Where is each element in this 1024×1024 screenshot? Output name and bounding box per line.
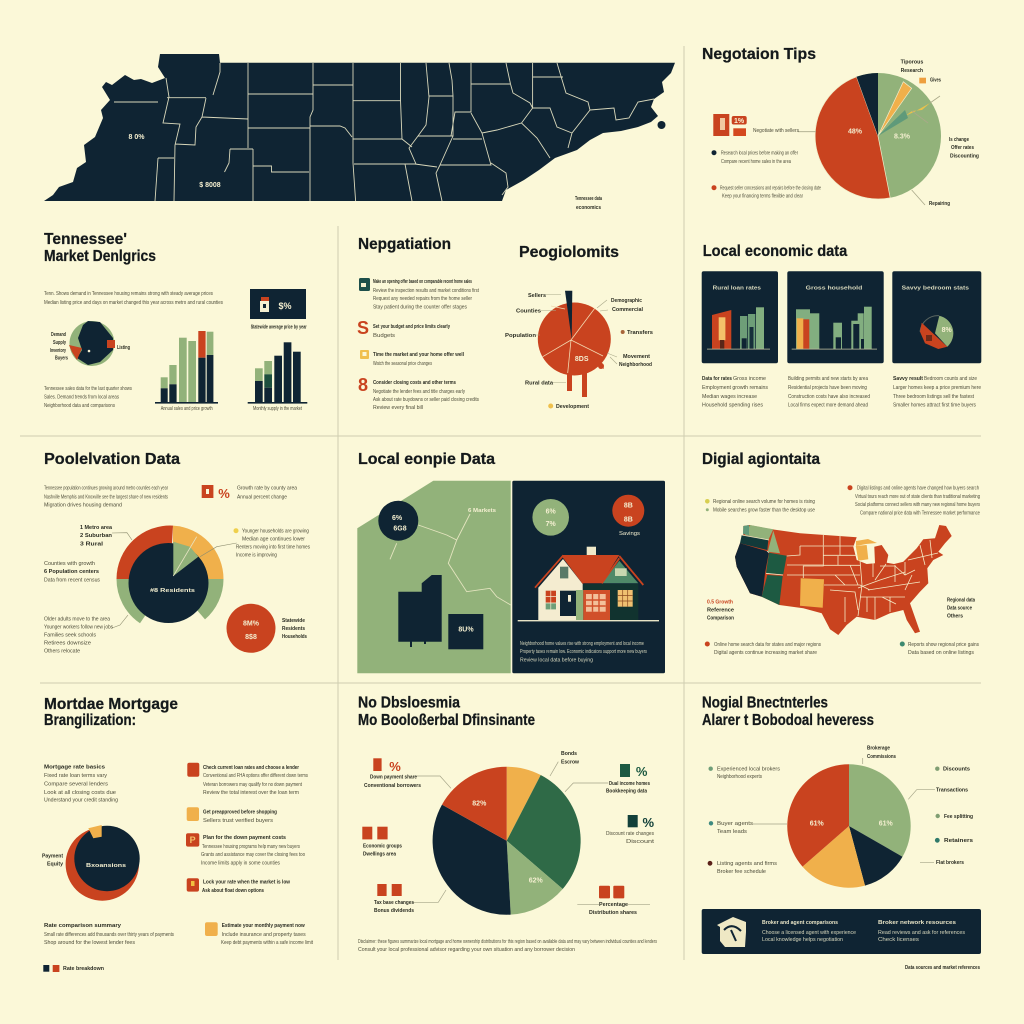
list item 4: 8	[358, 375, 368, 395]
red stat circle: Residents	[282, 626, 305, 632]
text block: Neighborhood data and comparisons	[44, 403, 115, 409]
heading	[44, 231, 156, 265]
donut chart	[42, 825, 140, 901]
pie chart: 61%	[879, 820, 893, 828]
heading: Mo Booloßerbal Dfinsinante	[358, 712, 535, 729]
text block: Sales. Demand trends from local areas	[44, 394, 119, 400]
captions: Smaller homes attract first time buyers	[893, 402, 976, 408]
bar chart 1	[155, 331, 218, 412]
captions: Data for rates	[702, 376, 732, 382]
stat callout: Annual percent change	[237, 494, 287, 500]
pie labels: Neighborhood	[619, 362, 652, 368]
captions: Larger homes keep a price premium here	[893, 385, 981, 391]
text blocks: Digital listings and online agents have changed how buyers search	[857, 486, 979, 492]
pie labels: Tiporous	[901, 60, 924, 66]
pie labels: Movement	[623, 354, 650, 360]
intro text: Tennessee population continues growing around metro counties each year	[44, 486, 168, 492]
item 3: Plan for the down payment costs	[203, 835, 286, 841]
map legend: 0.5 Growth	[707, 600, 733, 606]
navy house panel: Savings	[619, 531, 641, 537]
red stat circle	[226, 604, 307, 653]
callouts: Tax base changes	[374, 900, 414, 906]
pie labels: Transfers	[627, 330, 653, 336]
captions: Three bedroom listings sell the fastest	[893, 394, 975, 400]
green map panel: 6%	[392, 515, 403, 522]
callouts: Down payment share	[370, 774, 417, 780]
map note: Tennessee data	[575, 196, 602, 202]
intro text: Median listing price and days on market changed this year across metro and rural counties	[44, 300, 223, 306]
card 3: Savvy bedroom stats	[902, 286, 969, 292]
list item 2	[357, 318, 450, 339]
captions: Gross income	[733, 376, 766, 382]
bottom left text: Rate comparison summary	[44, 923, 121, 929]
pie labels: Population	[505, 333, 536, 339]
bottom left text: Small rate differences add thousands over thirty years of payments	[44, 932, 174, 938]
navy house panel: 8B	[624, 516, 633, 524]
navy house panel: 6%	[546, 508, 557, 516]
captions: Residential projects have been moving	[788, 385, 867, 391]
text block: Compare recent home sales in the area	[721, 159, 791, 165]
icon: house	[518, 547, 659, 621]
pie labels: Commercial	[612, 307, 644, 313]
pie chart	[798, 73, 941, 205]
left text block: Compare several lenders	[44, 782, 109, 788]
item 3: Income limits apply in some counties	[201, 860, 280, 866]
intro text: Migration drives housing demand	[44, 502, 122, 508]
list item 4: Negotiate the lender fees and title charges early	[373, 389, 465, 395]
labels: Income is improving	[236, 552, 277, 558]
labels: 2 Suburban	[80, 533, 112, 539]
callouts: Discount rate changes	[606, 831, 654, 837]
USA map	[735, 525, 952, 635]
left text block: Look at all closing costs due	[44, 790, 116, 796]
list item 3: Time the market and your home offer well	[373, 352, 465, 358]
text blocks: Social platforms connect sellers with many new regional home buyers	[855, 502, 980, 508]
heading: Digial agiontaita	[702, 451, 820, 468]
labels: Experienced local brokers	[717, 766, 781, 772]
heading: Peogiolomits	[519, 244, 619, 261]
item 2: Get preapproved before shopping	[203, 810, 277, 816]
captions	[702, 376, 981, 408]
panel: distribution pie	[358, 695, 657, 953]
navy stat box	[250, 289, 307, 330]
item 1: Conventional and FHA options offer different down terms	[203, 773, 308, 779]
text blocks: Mobile searches grow faster than the desktop use	[713, 508, 815, 514]
intro text	[44, 291, 223, 306]
labels: Younger households are growing	[242, 528, 309, 534]
donut chart: Payment	[42, 854, 63, 860]
item 1	[187, 763, 308, 796]
bar chart 2: Monthly supply in the market	[253, 406, 302, 412]
labels: Renters moving into first time homes	[236, 544, 310, 550]
item 3	[186, 833, 305, 866]
pie labels	[505, 293, 653, 410]
green map panel: 6 Markets	[468, 508, 496, 514]
navy house panel: 7%	[546, 521, 557, 528]
captions: Employment growth remains	[702, 385, 769, 391]
list item 3: Watch the seasonal price changes	[373, 361, 432, 367]
red stat circle: Households	[282, 634, 307, 640]
pie chart	[433, 767, 581, 915]
pie labels: Gives	[930, 78, 941, 84]
panel: Tennessee market dynamics	[44, 231, 307, 412]
text block	[44, 386, 132, 409]
labels: Buyer agents	[717, 821, 754, 827]
map note: economics	[576, 205, 601, 211]
text blocks	[705, 485, 980, 516]
labels: Families seek schools	[44, 632, 97, 638]
donut chart: Bxoansions	[86, 863, 126, 869]
map: Tennessee counties	[44, 54, 675, 201]
pie labels: Development	[556, 404, 589, 410]
text blocks: Virtual tours reach more out of state clients than traditional marketing	[855, 494, 980, 500]
callouts: Dwellings area	[363, 852, 396, 858]
pie labels: Counties	[516, 308, 541, 314]
list item 4: Review every final bill	[373, 405, 423, 411]
labels: Counties with growth	[44, 561, 95, 567]
pie chart	[787, 764, 911, 888]
list item 1: Make an opening offer based on comparable recent home sales	[373, 279, 472, 285]
list item 4: Ask about rate buydowns or seller paid closing credits	[373, 397, 479, 403]
panel: regional pie	[505, 244, 653, 410]
labels: Retainers	[944, 838, 973, 844]
left text block: Fixed rate loan terms vary	[44, 773, 108, 779]
intro text: Tenn. Shows demand in Tennessee housing remains strong with steady average prices	[44, 291, 213, 297]
pie labels: Discounting	[950, 154, 979, 160]
item 3: P	[190, 835, 196, 845]
navy stat box: $%	[278, 301, 292, 311]
card 1	[702, 271, 778, 363]
bottom left text	[44, 923, 174, 946]
footnote text: Disclaimer: these figures summarize local mortgage and home ownership distributions for this region based on available data and may vary between individual counties and lenders	[358, 939, 657, 945]
pie chart with drips: 8DS	[575, 356, 589, 363]
icon: house document	[717, 917, 746, 947]
map legend: Online home search data for states and major regions	[714, 642, 821, 648]
pie labels: Rural data	[525, 380, 553, 386]
icon: percent tag	[713, 114, 747, 136]
list item 2: Set your budget and price limits clearly	[373, 324, 450, 330]
panel: negotiation tips	[702, 46, 979, 207]
left text block: Understand your credit standing	[44, 798, 118, 804]
labels: Younger workers follow new jobs	[44, 624, 113, 630]
donut chart: Equity	[47, 862, 63, 868]
card 2	[787, 271, 884, 363]
navy house panel	[512, 481, 665, 673]
donut chart: #8 Residents	[150, 588, 195, 594]
pie labels: Repairing	[929, 201, 950, 207]
house caption: Review local data before buying	[520, 658, 593, 664]
donut chart: Inventory	[50, 348, 66, 354]
panel: national map	[702, 451, 980, 656]
navy banner: Read reviews and ask for references	[878, 930, 966, 936]
callouts: Bookkeeping data	[606, 788, 647, 794]
callouts: Percentage	[599, 902, 628, 908]
labels: Retirees downsize	[44, 640, 91, 646]
text blocks: Compare national price data with Tennessee market performance	[860, 510, 980, 516]
house caption: Property taxes remain low. Economic indicators support more new buyers	[520, 649, 647, 655]
captions: Median wages increase	[702, 394, 757, 400]
card 3: 8%	[942, 327, 953, 334]
bar chart 2	[248, 342, 307, 412]
captions: Local firms expect more demand ahead	[788, 402, 868, 408]
map legend: Digital agents continue increasing market share	[714, 650, 817, 656]
captions: Bedroom counts and size	[924, 376, 977, 382]
donut chart: Supply	[53, 340, 66, 346]
pie labels: Offer rates	[951, 145, 974, 151]
item 5: Estimate your monthly payment now	[222, 923, 305, 929]
heading: Mortdae Mortgage	[44, 696, 178, 713]
navy banner	[702, 909, 981, 954]
pie chart: 48%	[848, 128, 863, 136]
pie chart: 8.3%	[894, 134, 911, 140]
heading: Tennessee'	[44, 231, 127, 248]
list item 1	[359, 278, 480, 310]
item 5: Include insurance and property taxes	[222, 932, 306, 938]
intro text	[44, 486, 168, 508]
labels: Older adults move to the area	[44, 616, 110, 622]
callouts: Discount	[626, 839, 655, 845]
callouts: %	[636, 764, 648, 779]
list item 3	[360, 350, 465, 367]
green map panel: 8U%	[458, 626, 474, 634]
text block: Request seller concessions and repairs before the closing date	[720, 186, 821, 192]
item 4: Ask about float down options	[202, 888, 264, 894]
card 2: Gross household	[806, 286, 862, 292]
footer note: Data sources and market references	[905, 965, 980, 971]
pie chart: 62%	[529, 878, 543, 884]
pie chart with drips	[538, 291, 611, 397]
red stat circle: Statewide	[282, 618, 305, 624]
house caption: Neighborhood home values rise with strong employment and local income	[520, 641, 644, 647]
pie labels: Sellers	[528, 293, 546, 299]
item 5	[205, 922, 314, 946]
captions: Savvy result	[893, 376, 923, 382]
map legend: Reference	[707, 608, 734, 614]
heading: Brangilization:	[44, 712, 136, 729]
text block	[712, 128, 821, 200]
text block: Tennessee sales data for the last quarter shows	[44, 386, 132, 392]
navy banner: Check licenses	[878, 937, 920, 943]
text block: Keep your financing terms flexible and clear	[722, 194, 803, 200]
labels: Broker fee schedule	[717, 869, 766, 875]
item 4: Lock your rate when the market is low	[203, 880, 290, 886]
pie labels: Research	[901, 68, 923, 74]
item 2: Sellers trust verified buyers	[203, 818, 274, 824]
red stat circle: 8M%	[243, 620, 260, 628]
callouts: Bonds	[561, 751, 577, 757]
red stat circle: 8$8	[245, 634, 257, 641]
list item 4	[358, 375, 479, 411]
stat callout	[202, 485, 297, 501]
donut chart	[112, 526, 237, 628]
item 3: Grants and assistance may cover the closing fees too	[201, 852, 305, 858]
labels	[708, 746, 973, 875]
heading: Local economic data	[703, 243, 847, 260]
left text block: Mortgage rate basics	[44, 764, 105, 770]
heading: Nogial Bnectnterles	[702, 695, 828, 712]
navy stat box: Statewide average price by year	[251, 324, 307, 330]
panel: negotiation list	[357, 236, 480, 411]
map legend	[705, 598, 979, 656]
callouts: Bonus dividends	[374, 908, 414, 914]
house caption	[520, 641, 647, 664]
panel: local economic data	[702, 243, 981, 408]
captions: Household spending rises	[702, 402, 764, 408]
labels: Flat brokers	[936, 860, 964, 866]
navy banner: Choose a licensed agent with experience	[762, 930, 856, 936]
heading	[358, 695, 535, 729]
callouts: Distribution shares	[589, 910, 637, 916]
map: Tennessee counties: $ 8008	[199, 182, 221, 189]
item 1: Review the total interest over the loan term	[203, 790, 299, 796]
map legend: Comparison	[707, 616, 734, 622]
heading: Market Denlgrics	[44, 248, 156, 265]
panel: local data map and house	[357, 451, 665, 673]
pie chart: 82%	[472, 800, 487, 808]
labels: 1 Metro area	[80, 525, 112, 531]
text block: Negotiate with sellers	[753, 128, 799, 134]
labels	[44, 525, 310, 654]
stat callout: Growth rate by county area	[237, 486, 297, 492]
donut chart	[50, 321, 130, 366]
map legend: Regional data	[947, 598, 975, 604]
footnote text	[358, 939, 657, 953]
callouts	[362, 751, 655, 916]
legend	[43, 965, 104, 972]
green map panel: 6G8	[393, 526, 407, 532]
green map panel	[357, 481, 511, 673]
list item 2: Budgets	[373, 333, 396, 339]
heading	[44, 696, 178, 729]
navy banner: Broker network resources	[878, 920, 956, 926]
labels: Neighborhood experts	[717, 774, 762, 780]
map legend: Others	[947, 614, 963, 620]
left text block	[44, 764, 118, 804]
intro text: Nashville Memphis and Knoxville see the largest share of new residents	[44, 494, 168, 500]
captions: Construction costs have also increased	[788, 394, 870, 400]
navy banner: Broker and agent comparisons	[762, 920, 838, 926]
labels: Team leads	[717, 829, 748, 835]
labels: 3 Rural	[80, 542, 104, 548]
heading: Negotaion Tips	[702, 46, 816, 63]
heading: Local eonpie Data	[358, 451, 495, 468]
heading: Poolelvation Data	[44, 451, 180, 468]
labels: Median age continues lower	[242, 536, 305, 542]
labels: Discounts	[943, 766, 970, 772]
item 3: Tennessee housing programs help many new buyers	[202, 844, 300, 850]
card 1: Rural loan rates	[713, 286, 761, 292]
pie labels: Is change	[949, 137, 969, 143]
map note	[575, 196, 602, 211]
text block: Research local prices before making an offer	[721, 150, 798, 156]
heading: Alarer t Bobodoal heveress	[702, 712, 874, 729]
icon: percent tag: 1%	[734, 118, 745, 125]
navy banner: Local knowledge helps negotiation	[762, 937, 843, 943]
labels: Commissions	[867, 754, 896, 760]
text blocks: Regional online search volume for homes is rising	[713, 499, 815, 505]
captions: Building permits and new starts by area	[788, 376, 868, 382]
pie chart: 61%	[810, 820, 824, 828]
labels: Listing agents and firms	[717, 861, 778, 867]
footnote text: Consult your local professional advisor regarding your own situation and any borrower decision	[358, 947, 575, 953]
pie labels: Demographic	[611, 298, 642, 304]
card 3	[892, 271, 981, 363]
bottom left text: Shop around for the lowest lender fees	[44, 940, 136, 946]
labels: Fee splitting	[944, 814, 973, 820]
list item 4: Consider closing costs and other terms	[373, 380, 456, 386]
list item 2: S	[357, 318, 369, 338]
list item 1: Request any needed repairs from the home seller	[373, 296, 472, 302]
item 1: Check current loan rates and choose a lender	[203, 765, 299, 771]
labels: Brokerage	[867, 746, 890, 752]
labels: Data from recent census	[44, 578, 101, 584]
callouts: Conventional borrowers	[364, 783, 421, 789]
map legend: Reports show regional price gains	[908, 642, 979, 648]
callouts: Economic groups	[363, 844, 402, 850]
list item 1: Review the inspection results and market conditions first	[373, 288, 480, 294]
stat callout: %	[218, 486, 230, 501]
legend: Rate breakdown	[63, 966, 104, 972]
map legend: Data based on online listings	[908, 650, 975, 656]
donut chart: Listing	[117, 345, 130, 351]
heading: Nepgatiation	[358, 236, 451, 253]
panel: mortgage	[42, 696, 314, 972]
donut chart: Buyers	[55, 356, 68, 362]
heading	[702, 695, 874, 729]
map: Tennessee counties: 8 0%	[129, 134, 145, 141]
donut chart: Demand	[51, 332, 66, 338]
item 5: Keep debt payments within a safe income limit	[221, 940, 314, 946]
item 1: Veteran borrowers may qualify for no down payment	[203, 782, 303, 788]
labels: Others relocate	[44, 648, 80, 654]
labels: Transactions	[936, 788, 968, 794]
list item 1: Stay patient during the counter offer stages	[373, 304, 467, 310]
callouts: Escrow	[561, 760, 579, 766]
callouts: Dual income homes	[609, 781, 650, 787]
bar chart 1: Annual sales and price growth	[161, 406, 213, 412]
panel: agent and broker pie	[702, 695, 981, 971]
callouts: %	[643, 815, 655, 830]
panel: population data	[44, 451, 310, 654]
item 2	[187, 807, 277, 824]
pie labels	[901, 60, 979, 207]
callouts: %	[389, 759, 401, 774]
map legend: Data source	[947, 606, 972, 612]
labels: 6 Population centers	[44, 569, 99, 575]
item 4	[187, 878, 290, 894]
heading: No Dbsloesmia	[358, 695, 460, 712]
navy house panel: 8B	[624, 502, 633, 510]
